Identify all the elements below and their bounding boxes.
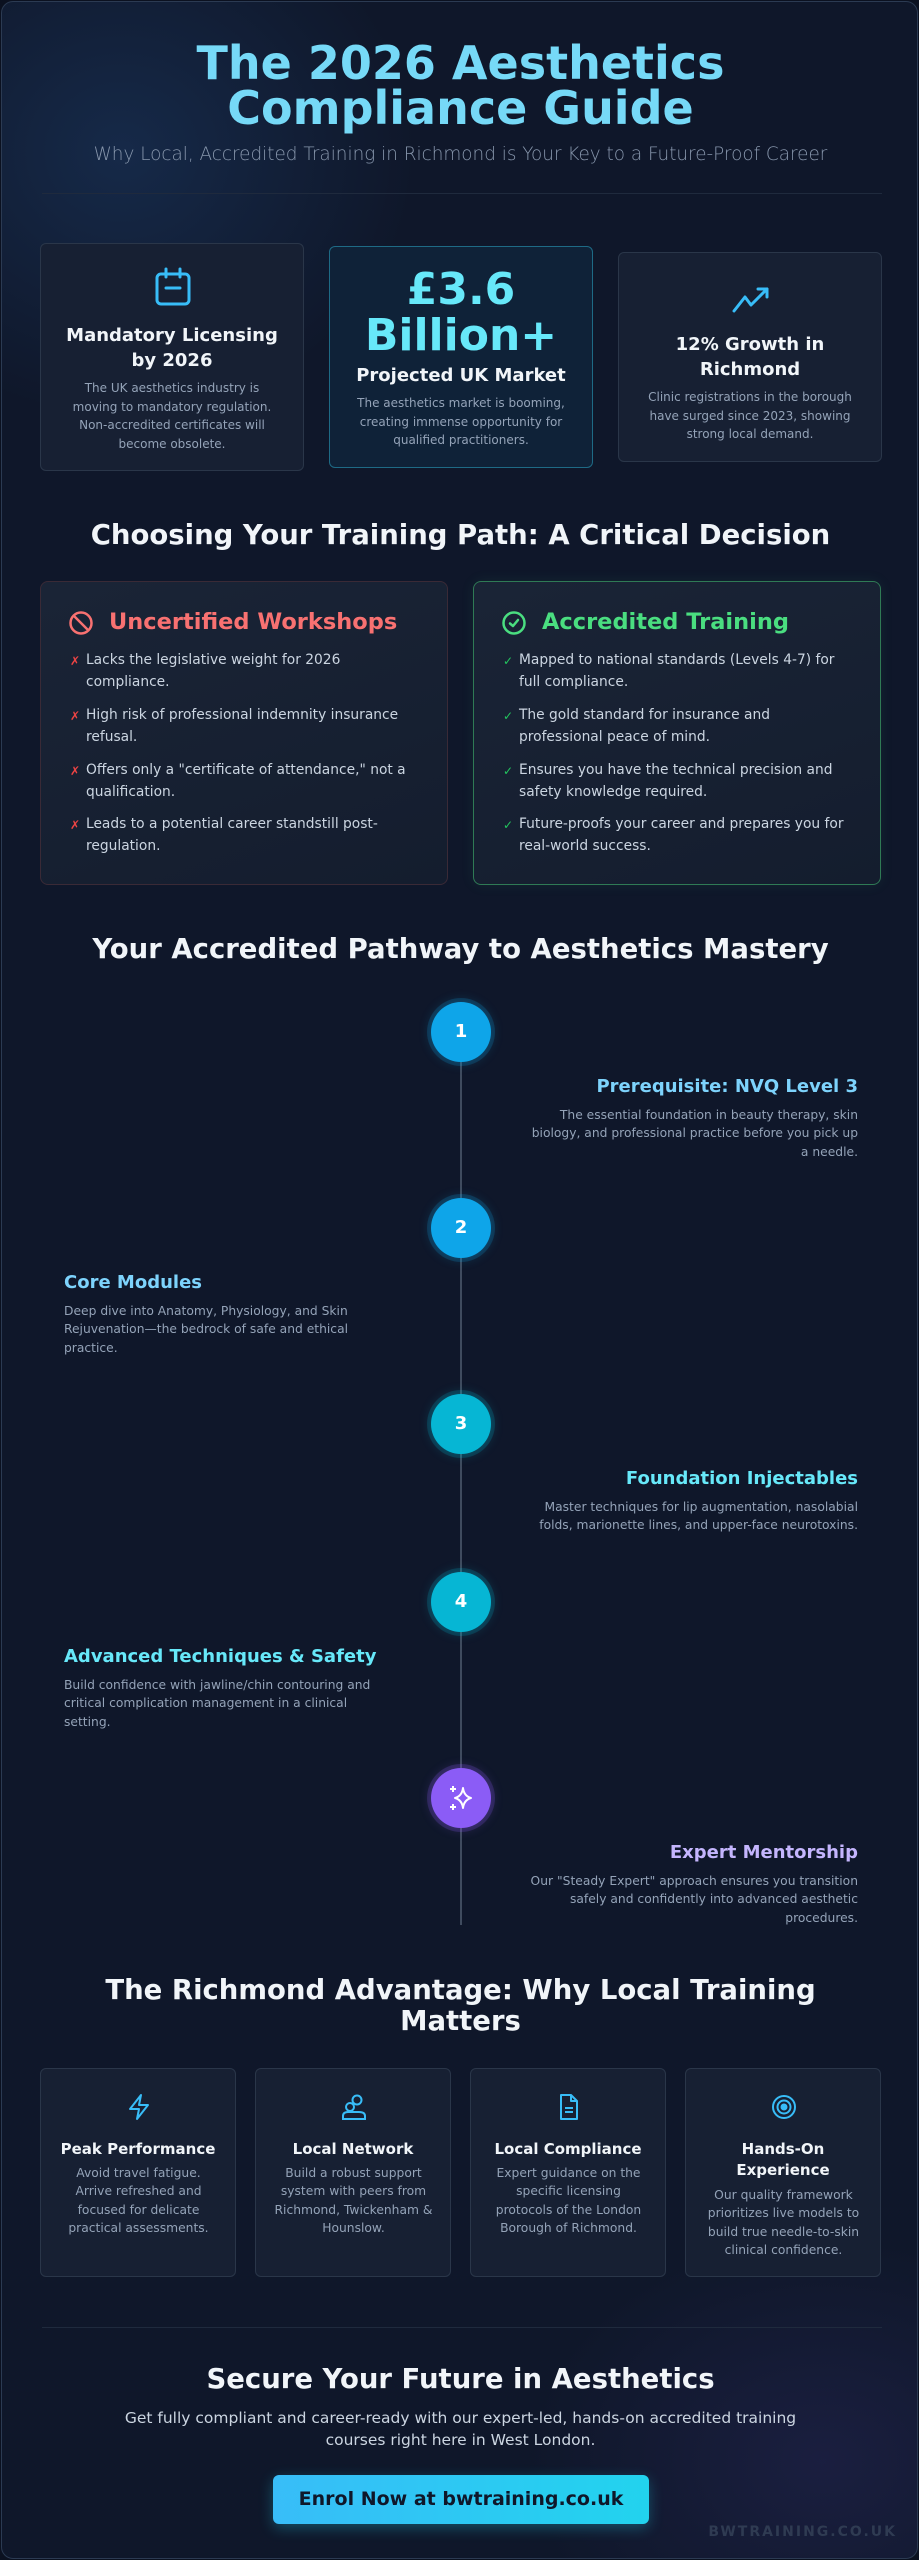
step 2 circle: 2 xyxy=(455,1217,467,1238)
list item: Lacks the legislative weight for 2026 compliance. xyxy=(86,652,340,690)
card title: 12% Growth in xyxy=(676,334,824,355)
big number: £3.6 xyxy=(407,264,515,315)
watermark: BWTRAINING.CO.UK xyxy=(708,2524,897,2540)
list item: ✓ xyxy=(503,764,513,778)
button: Enrol Now at bwtraining.co.uk xyxy=(299,2488,623,2510)
step 5 text: Our "Steady Expert" approach ensures you transition safely and confidently into advanced aesthetic procedures. xyxy=(531,1874,858,1925)
icon: document xyxy=(560,2094,578,2120)
card title: Richmond xyxy=(700,359,800,380)
stat card: mandatory licensing xyxy=(40,243,304,471)
step 1 circle xyxy=(431,1002,491,1062)
card text: The UK aesthetics industry is moving to mandatory regulation. Non-accredited certificates will become obsolete. xyxy=(73,381,271,450)
stat card: market size xyxy=(329,246,593,468)
card text: The aesthetics market is booming, creating immense opportunity for qualified practitioners. xyxy=(357,396,565,447)
icon: check circle xyxy=(502,611,526,635)
big number: Billion+ xyxy=(365,310,557,361)
icon: trending up xyxy=(732,287,768,313)
step 3 text: Foundation Injectables xyxy=(626,1468,858,1489)
card text: Build a robust support system with peers from Richmond, Twickenham & Hounslow. xyxy=(274,2166,432,2235)
card text: Our quality framework prioritizes live models to build true needle-to-skin clinical confidence. xyxy=(708,2188,859,2257)
card title xyxy=(66,325,278,371)
step 3 circle xyxy=(431,1394,491,1454)
list item: ✗ xyxy=(70,709,80,723)
step 2 text: Core Modules xyxy=(64,1272,202,1293)
panel heading: Accredited Training xyxy=(542,609,789,635)
heading: cta: Secure Your Future in Aesthetics xyxy=(206,2363,715,2395)
subtitle: Why Local, Accredited Training in Richmond is Your Key to a Future-Proof Career xyxy=(94,144,827,165)
step 3 text xyxy=(539,1468,858,1532)
step 4 circle: 4 xyxy=(455,1591,467,1612)
card: peak performance xyxy=(40,2068,236,2277)
list item: Ensures you have the technical precision and safety knowledge required. xyxy=(519,762,832,800)
heading: training path: Choosing Your Training Path: A Critical Decision xyxy=(91,519,830,551)
heading: richmond advantage: The Richmond Advantage: Why Local Training Matters xyxy=(105,1974,816,2037)
step 4 circle xyxy=(431,1572,491,1632)
step 5 text: Expert Mentorship xyxy=(670,1842,858,1863)
list item: ✓ xyxy=(503,709,513,723)
card text: Expert guidance on the specific licensing protocols of the London Borough of Richmond. xyxy=(496,2166,641,2235)
title: Compliance Guide xyxy=(227,81,694,135)
list item: ✓ xyxy=(503,654,513,668)
card title: Local Network xyxy=(293,2140,413,2158)
step 2 text: Deep dive into Anatomy, Physiology, and Skin Rejuvenation—the bedrock of safe and ethical practice. xyxy=(64,1304,348,1355)
list item: Future-proofs your career and prepares you for real-world success. xyxy=(519,816,844,854)
card: local network xyxy=(255,2068,451,2277)
list item: Offers only a "certificate of attendance," not a qualification. xyxy=(86,762,406,800)
step 1 text: Prerequisite: NVQ Level 3 xyxy=(596,1076,858,1097)
icon: calendar xyxy=(156,268,190,306)
list item: Mapped to national standards (Levels 4-7) for full compliance. xyxy=(519,652,834,690)
icon: lightning xyxy=(129,2094,149,2120)
step 4 text: Advanced Techniques & Safety xyxy=(64,1646,376,1667)
card title: Experience xyxy=(736,2161,830,2179)
step 5 circle xyxy=(431,1768,491,1828)
list item: ✗ xyxy=(70,654,80,668)
list item: Leads to a potential career standstill post-regulation. xyxy=(86,816,378,854)
list item: The gold standard for insurance and professional peace of mind. xyxy=(519,707,770,744)
list item: High risk of professional indemnity insurance refusal. xyxy=(86,707,398,744)
step 3 text: Master techniques for lip augmentation, nasolabial folds, marionette lines, and upper-face neurotoxins. xyxy=(539,1500,858,1532)
timeline xyxy=(64,996,858,1925)
icon: target xyxy=(772,2095,796,2119)
list item: ✓ xyxy=(503,818,513,832)
card title xyxy=(676,334,824,380)
step 4 text xyxy=(64,1646,376,1729)
big number xyxy=(365,264,557,361)
card: hands-on experience xyxy=(685,2068,881,2277)
card title: Local Compliance xyxy=(494,2140,642,2158)
panel: accredited training xyxy=(473,581,881,885)
step 2 circle xyxy=(431,1198,491,1258)
step 1 circle: 1 xyxy=(455,1021,467,1042)
list item: ✗ xyxy=(70,818,80,832)
step 4 text: Build confidence with jawline/chin contouring and critical complication management in a clinical setting. xyxy=(64,1678,370,1729)
step 3 circle: 3 xyxy=(455,1413,467,1434)
card title: Peak Performance xyxy=(61,2140,215,2158)
icon: ban xyxy=(69,611,93,635)
title: The 2026 Aesthetics xyxy=(197,36,724,90)
card title xyxy=(736,2140,830,2179)
card text: Clinic registrations in the borough have surged since 2023, showing strong local demand. xyxy=(648,390,852,441)
title xyxy=(196,36,724,135)
panel: uncertified workshops xyxy=(40,581,448,885)
card text: Avoid travel fatigue. Arrive refreshed and focused for delicate practical assessments. xyxy=(68,2166,209,2235)
step 1 text: The essential foundation in beauty therapy, skin biology, and professional practice before you pick up a needle. xyxy=(532,1108,858,1159)
step 5 text xyxy=(531,1842,858,1925)
step 2 text xyxy=(64,1272,348,1355)
stat card: growth xyxy=(618,252,882,462)
list item: ✗ xyxy=(70,764,80,778)
heading: pathway: Your Accredited Pathway to Aesthetics Mastery xyxy=(92,933,829,965)
step 1 text xyxy=(532,1076,858,1159)
button xyxy=(273,2475,649,2524)
cta text: Get fully compliant and career-ready with our expert-led, hands-on accredited training courses right here in West London. xyxy=(125,2409,796,2449)
panel heading: Uncertified Workshops xyxy=(109,609,397,635)
card title: Mandatory Licensing xyxy=(66,325,278,346)
card title: Hands-On xyxy=(742,2140,824,2158)
icon: people xyxy=(342,2094,366,2120)
card: local compliance xyxy=(470,2068,666,2277)
card title: by 2026 xyxy=(132,350,212,371)
card title: Projected UK Market xyxy=(356,365,566,386)
